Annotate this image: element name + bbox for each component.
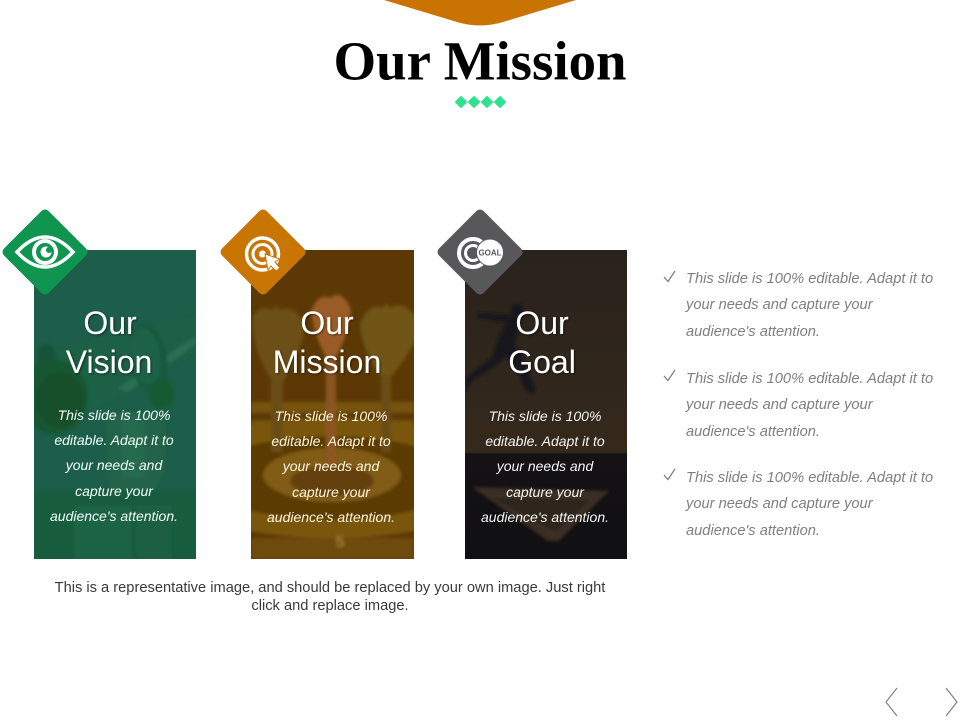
icon: target diamond: [218, 207, 308, 297]
body text: audience's attention.: [481, 509, 609, 525]
body text: editable. Adapt it to: [271, 433, 391, 449]
heading: Mission: [273, 344, 381, 380]
caption: [55, 580, 605, 614]
item 2: [664, 370, 933, 440]
heading: [66, 305, 152, 380]
icon: goal diamond: GOAL: [478, 248, 502, 258]
body text: capture your: [506, 484, 585, 500]
heading: [508, 305, 576, 380]
arrow: next: [946, 688, 957, 716]
item 1: [664, 271, 933, 340]
icon: title diamonds: [455, 96, 506, 108]
heading: Our: [83, 305, 137, 341]
body text: This slide is 100%: [489, 408, 601, 424]
body text: your needs and: [65, 457, 163, 473]
body text: audience's attention.: [50, 508, 178, 524]
panel: our vision: [0, 207, 196, 559]
body text: audience's attention.: [267, 509, 395, 525]
caption: This is a representative image, and should be replaced by your own image. Just right: [55, 580, 605, 596]
body text: capture your: [75, 483, 154, 499]
body text: editable. Adapt it to: [485, 433, 605, 449]
top banner shape: [384, 0, 576, 26]
image: dartboard and darts: 5: [336, 534, 345, 551]
item 2: your needs and capture your: [685, 397, 874, 413]
heading: Our: [300, 305, 354, 341]
item 3: This slide is 100% editable. Adapt it to: [686, 470, 933, 486]
heading: [273, 305, 381, 380]
body text: [50, 407, 178, 524]
body text: [481, 408, 609, 525]
arrow: previous: [886, 688, 897, 716]
item 1: This slide is 100% editable. Adapt it to: [686, 271, 933, 287]
heading: Our: [515, 305, 569, 341]
item 2: audience's attention.: [686, 424, 820, 440]
item 3: your needs and capture your: [685, 496, 874, 512]
checklist: [664, 271, 933, 539]
body text: your needs and: [496, 458, 594, 474]
icon: eye diamond: [0, 207, 90, 297]
item 2: This slide is 100% editable. Adapt it to: [686, 371, 933, 387]
body text: [267, 408, 395, 525]
caption: click and replace image.: [251, 598, 409, 614]
item 1: your needs and capture your: [685, 297, 874, 313]
title: Our Mission: [334, 30, 626, 92]
icon: goal diamond: [435, 207, 525, 297]
heading: Vision: [66, 344, 152, 380]
body text: This slide is 100%: [275, 408, 387, 424]
image: telescope: [34, 326, 196, 558]
heading: Goal: [508, 344, 576, 380]
body text: capture your: [292, 484, 371, 500]
panel: our mission: [220, 210, 414, 559]
item 3: audience's attention.: [686, 523, 820, 539]
image: runner silhouette: [465, 304, 609, 541]
item 1: audience's attention.: [686, 324, 820, 340]
body text: your needs and: [282, 458, 380, 474]
image: dartboard and darts: [251, 294, 414, 559]
panel: our goal: [435, 207, 627, 559]
body text: This slide is 100%: [58, 407, 170, 423]
item 3: [664, 469, 933, 539]
body text: editable. Adapt it to: [54, 432, 174, 448]
